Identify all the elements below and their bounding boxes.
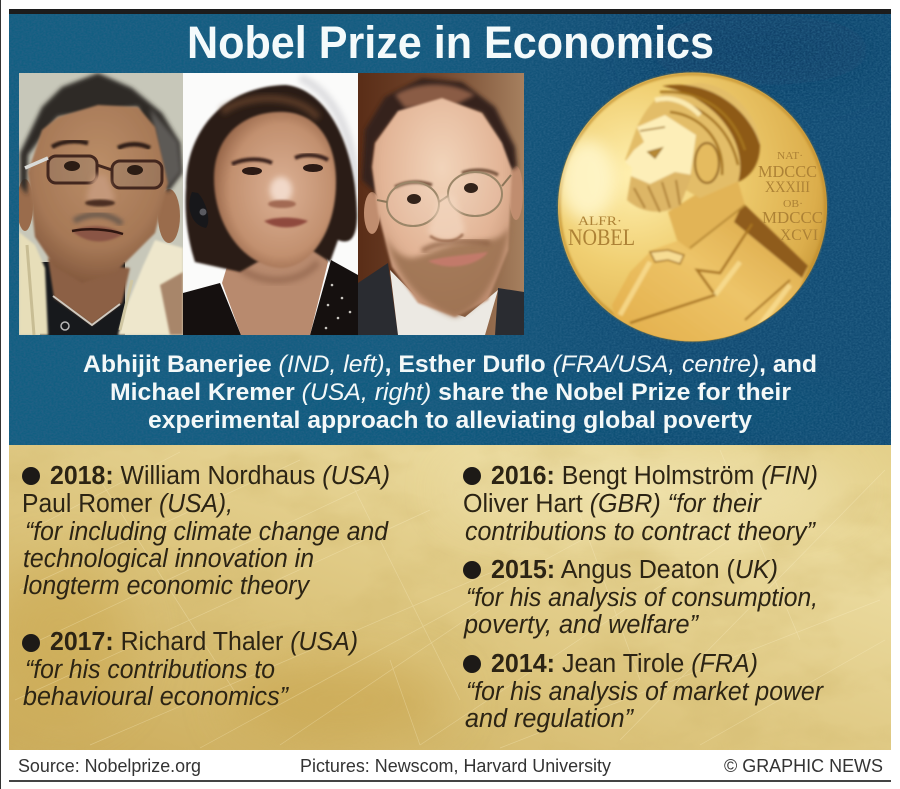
stubble beard (385, 225, 510, 317)
entry: 2015 prize: “for his analysis of consumption, (466, 584, 818, 612)
icon: gold Nobel medal (558, 72, 827, 345)
entry: 2017 prize: behavioural economics” (23, 683, 289, 711)
entry: 2015 prize (463, 556, 818, 639)
entry: 2018 prize (22, 462, 390, 600)
entry: 2014 prize (463, 650, 824, 733)
entry: 2018 prize: technological innovation in (23, 545, 314, 573)
entry: 2015 prize: 2015: Angus Deaton (UK) (491, 556, 778, 584)
entry: 2014 prize: and regulation” (465, 705, 634, 733)
subheading text (83, 351, 817, 434)
brows (52, 141, 150, 148)
hair (185, 85, 357, 272)
medal inscription: right: NAT· (777, 151, 803, 162)
moustache (422, 241, 490, 251)
entry: 2016 prize (463, 462, 818, 546)
hair (20, 73, 182, 195)
panel: blue header background (9, 14, 891, 445)
entry: 2014 prize: “for his analysis of market power (466, 678, 824, 706)
shawl (19, 232, 48, 335)
photo: Michael Kremer (358, 73, 524, 335)
icon: gold Nobel medal: OB· (783, 199, 803, 210)
footer credits: Source: Nobelprize.org (18, 755, 201, 776)
title: Nobel Prize in Economics (187, 17, 714, 68)
bow tie (650, 250, 684, 264)
entry: 2016 prize: Oliver Hart (GBR) “for their (463, 490, 762, 518)
nose (86, 175, 115, 206)
entry: 2016 prize: 2016: Bengt Holmström (FIN) (491, 462, 818, 490)
entry: 2017 prize: 2017: Richard Thaler (USA) (50, 628, 358, 656)
brows (395, 170, 498, 187)
photo: Esther Duflo (183, 73, 358, 335)
face (625, 115, 696, 190)
neck (668, 178, 745, 250)
entry: 2014 prize: 2014: Jean Tirole (FRA) (491, 650, 758, 678)
ear (695, 143, 719, 183)
medal inscription: left: ALFR· (578, 213, 622, 228)
icon: gold Nobel medal: XXXIII (765, 179, 810, 196)
entry: 2017 prize: “for his contributions to (25, 656, 275, 684)
footer credits (9, 755, 891, 782)
shirt (390, 270, 498, 335)
nose (428, 195, 465, 240)
icon: gold Nobel medal: MDCCC (762, 208, 823, 227)
footer credits: © GRAPHIC NEWS (724, 755, 883, 776)
hair (362, 78, 517, 195)
entry: 2016 prize: contributions to contract theory” (465, 518, 816, 546)
entry: 2018 prize: longterm economic theory (23, 572, 311, 600)
neck (222, 245, 328, 335)
glasses (387, 172, 502, 226)
suit (358, 263, 524, 335)
coat and shoulder (612, 83, 808, 345)
ears (19, 179, 33, 231)
mouth (428, 252, 488, 266)
subheading text: Abhijit Banerjee (IND, left), Esther Duflo (FRA/USA, centre), and (83, 351, 817, 378)
face (28, 105, 168, 283)
entry: 2018 prize: “for including climate change and (25, 518, 389, 546)
hair and head (625, 83, 760, 198)
subheading text: experimental approach to alleviating global poverty (148, 407, 752, 434)
entry: 2017 prize (22, 628, 358, 711)
neck (48, 258, 130, 325)
entry: 2015 prize: poverty, and welfare” (463, 611, 699, 639)
icon: gold Nobel medal: XCVI (780, 227, 818, 244)
entry: 2018 prize: Paul Romer (USA), (22, 490, 233, 518)
earpiece (189, 192, 208, 228)
panel: gold parchment background (0, 445, 891, 750)
icon: gold Nobel medal: NOBEL (568, 225, 635, 250)
photo: Abhijit Banerjee (17, 73, 183, 335)
beard (627, 172, 692, 212)
clothing (183, 260, 358, 335)
glasses (48, 156, 162, 188)
shirt (40, 262, 125, 335)
icon: gold Nobel medal: MDCCC (758, 162, 817, 181)
mouth (72, 226, 123, 242)
face (214, 112, 336, 268)
subheading text: Michael Kremer (USA, right) share the Nobel Prize for their (110, 379, 791, 406)
footer credits: Pictures: Newscom, Harvard University (300, 755, 612, 776)
face (372, 98, 512, 317)
entry: 2018 prize: 2018: William Nordhaus (USA) (50, 462, 390, 490)
ears (364, 192, 380, 234)
mustache (74, 215, 122, 224)
